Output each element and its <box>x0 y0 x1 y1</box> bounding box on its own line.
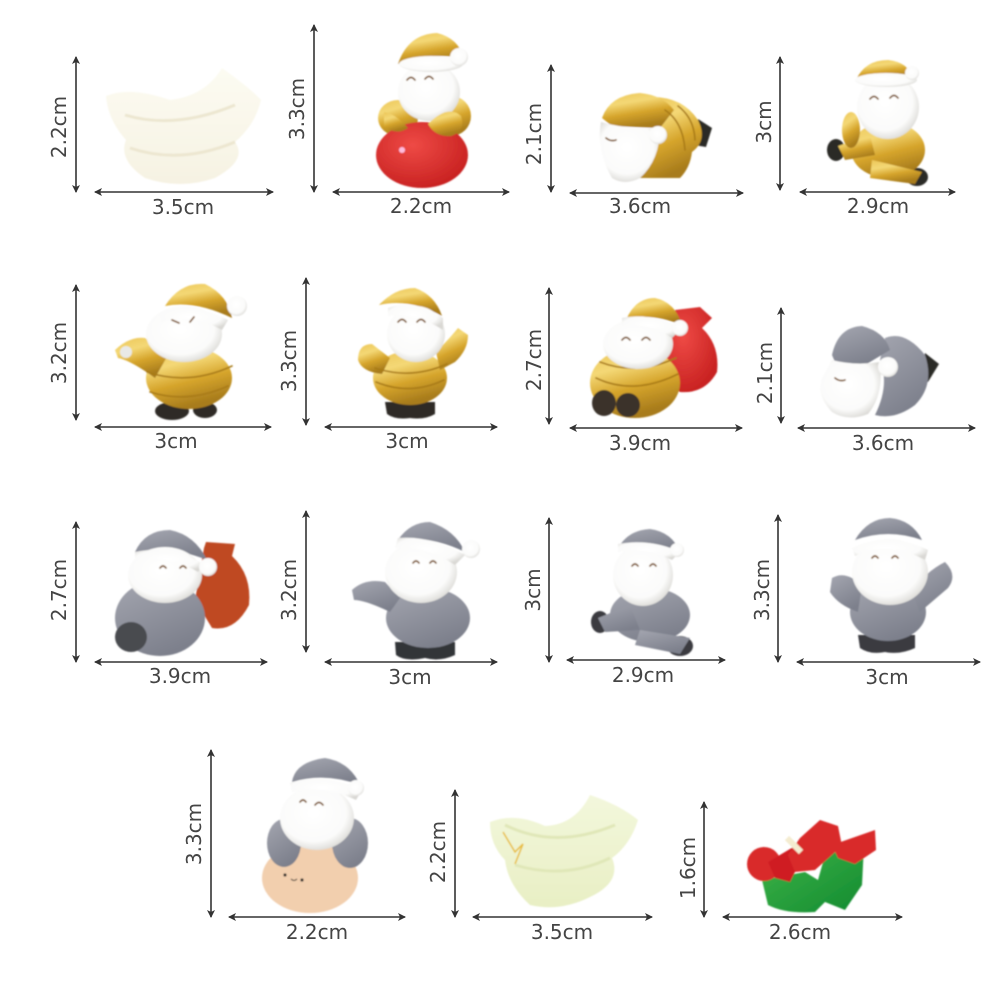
item 3: gold Santa lying <box>522 65 743 218</box>
item 13: grey Santa on peach bag <box>182 750 405 944</box>
height label: 2.7cm <box>47 559 71 621</box>
height label: 3cm <box>752 100 776 144</box>
dimension arrows <box>551 65 743 193</box>
height label: 3.3cm <box>277 330 301 392</box>
item 9: grey Santa with orange sack <box>47 522 267 688</box>
item 4: gold Santa sitting <box>752 57 955 218</box>
dimension arrows <box>211 750 405 917</box>
dimension arrows <box>781 308 975 428</box>
height label: 3.3cm <box>750 559 774 621</box>
dimension arrows <box>455 790 652 917</box>
item 10: grey Santa arm left <box>277 511 497 689</box>
width label: 3cm <box>865 665 909 689</box>
dimension arrows <box>76 285 271 427</box>
figure: grey Santa sitting <box>591 529 693 656</box>
item 2: gold Santa on red bag <box>285 25 509 218</box>
width label: 3cm <box>388 665 432 689</box>
figure: white sleigh <box>106 68 261 184</box>
height label: 2.1cm <box>522 103 546 165</box>
item 15: green gifts with red bow <box>676 802 902 944</box>
dimension arrows <box>76 57 273 192</box>
width label: 2.9cm <box>847 194 909 218</box>
item 6: gold Santa arms out <box>277 278 497 453</box>
figure: grey Santa on peach bag <box>262 758 368 913</box>
figure: green gifts with red bows <box>747 820 876 912</box>
height label: 3.2cm <box>277 559 301 621</box>
dimension arrows <box>778 515 980 662</box>
figure: grey Santa standing, arm out <box>352 522 480 659</box>
height label: 2.2cm <box>47 96 71 158</box>
height label: 2.7cm <box>522 329 546 391</box>
figure: gold Santa, arms out <box>358 288 468 418</box>
height label: 2.2cm <box>426 821 450 883</box>
item 1: white sleigh <box>47 57 273 219</box>
item 12: grey Santa arms out <box>750 515 980 689</box>
width label: 3.6cm <box>852 431 914 455</box>
item 11: grey Santa sitting <box>521 518 725 687</box>
item 8: grey Santa lying <box>753 308 975 455</box>
width label: 3.5cm <box>531 920 593 944</box>
dimension arrows <box>549 288 742 428</box>
figure: gold Santa sitting <box>827 60 928 186</box>
width label: 2.6cm <box>769 920 831 944</box>
item 5: gold Santa arm left <box>47 284 271 453</box>
figure: grey Santa lying <box>820 326 939 418</box>
width label: 3.6cm <box>609 194 671 218</box>
height label: 1.6cm <box>676 837 700 899</box>
dimension arrows <box>549 518 725 662</box>
height label: 3cm <box>521 568 545 612</box>
dimension arrows <box>76 522 267 662</box>
figure: pale green sleigh <box>490 795 638 907</box>
item 14: glowing sleigh <box>426 790 652 944</box>
figure: gold Santa with red sack <box>590 298 717 418</box>
figure: grey Santa with orange sack <box>115 530 249 656</box>
height label: 3.3cm <box>285 78 309 140</box>
dimension arrows <box>704 802 902 917</box>
height label: 3.3cm <box>182 803 206 865</box>
figure: gold Santa on red bag <box>376 33 471 188</box>
width label: 3cm <box>154 429 198 453</box>
figure: gold Santa lying <box>600 93 712 182</box>
width label: 3cm <box>385 429 429 453</box>
width label: 3.9cm <box>609 431 671 455</box>
figure: grey Santa, arms out <box>830 518 952 653</box>
dimension arrows <box>306 511 497 662</box>
width label: 3.5cm <box>152 195 214 219</box>
width label: 2.2cm <box>390 194 452 218</box>
item 7: gold Santa with red bag <box>522 288 742 455</box>
dimension arrows <box>314 25 509 192</box>
dimension arrows <box>306 278 497 427</box>
width label: 2.2cm <box>286 920 348 944</box>
width label: 2.9cm <box>612 663 674 687</box>
width label: 3.9cm <box>149 664 211 688</box>
dimension arrows <box>780 57 955 192</box>
height label: 3.2cm <box>47 322 71 384</box>
figure: gold Santa standing, arm out left <box>115 284 247 420</box>
height label: 2.1cm <box>753 342 777 404</box>
